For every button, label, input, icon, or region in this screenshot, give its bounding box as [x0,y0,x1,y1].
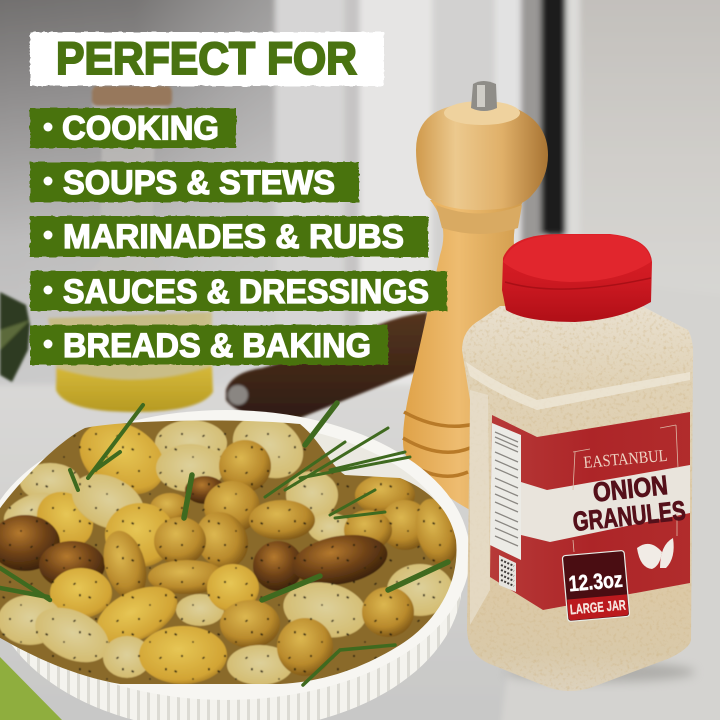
jar granule texture [462,305,693,691]
product jar: Eastanbul onion granules [462,234,695,691]
wooden pepper mill [403,81,548,510]
dark wooden pepper mill lying down [226,312,428,418]
jar left grip recess [470,390,490,625]
green napkin [0,657,62,720]
list: uses [30,108,447,365]
size badge [562,550,630,622]
roasted potatoes [0,403,465,685]
red cap [502,234,652,322]
jar body [462,305,693,691]
brand name: EASTANBUL [583,446,668,472]
item: breads and baking: BREADS & BAKING [63,327,371,365]
red label [490,412,690,610]
jar shadow [505,662,695,682]
headline banner: PERFECT FOR: PERFECT FOR [56,33,357,84]
blurred rosemary at left edge [0,292,30,382]
olive oil bottle [44,86,213,412]
white label band [521,465,690,542]
baking dish with roasted potatoes [0,403,470,720]
QR code [499,555,516,592]
item: sauces and dressings: SAUCES & DRESSINGS [63,273,429,311]
item: soups and stews: SOUPS & STEWS [63,164,335,202]
item: marinades and rubs: MARINADES & RUBS [63,218,404,256]
rosemary sprigs [0,403,448,685]
leaf icon [637,538,674,569]
nutrition panel [490,423,521,560]
product name [569,468,687,537]
gold frame lines [573,425,678,552]
product name: ONION [591,470,669,508]
item: cooking: COOKING [62,110,219,148]
size badge: LARGE JAR [569,597,626,617]
size badge: 12.3oz [568,567,624,596]
jar shoulder highlights [466,362,690,410]
white fluted dish [0,410,470,720]
